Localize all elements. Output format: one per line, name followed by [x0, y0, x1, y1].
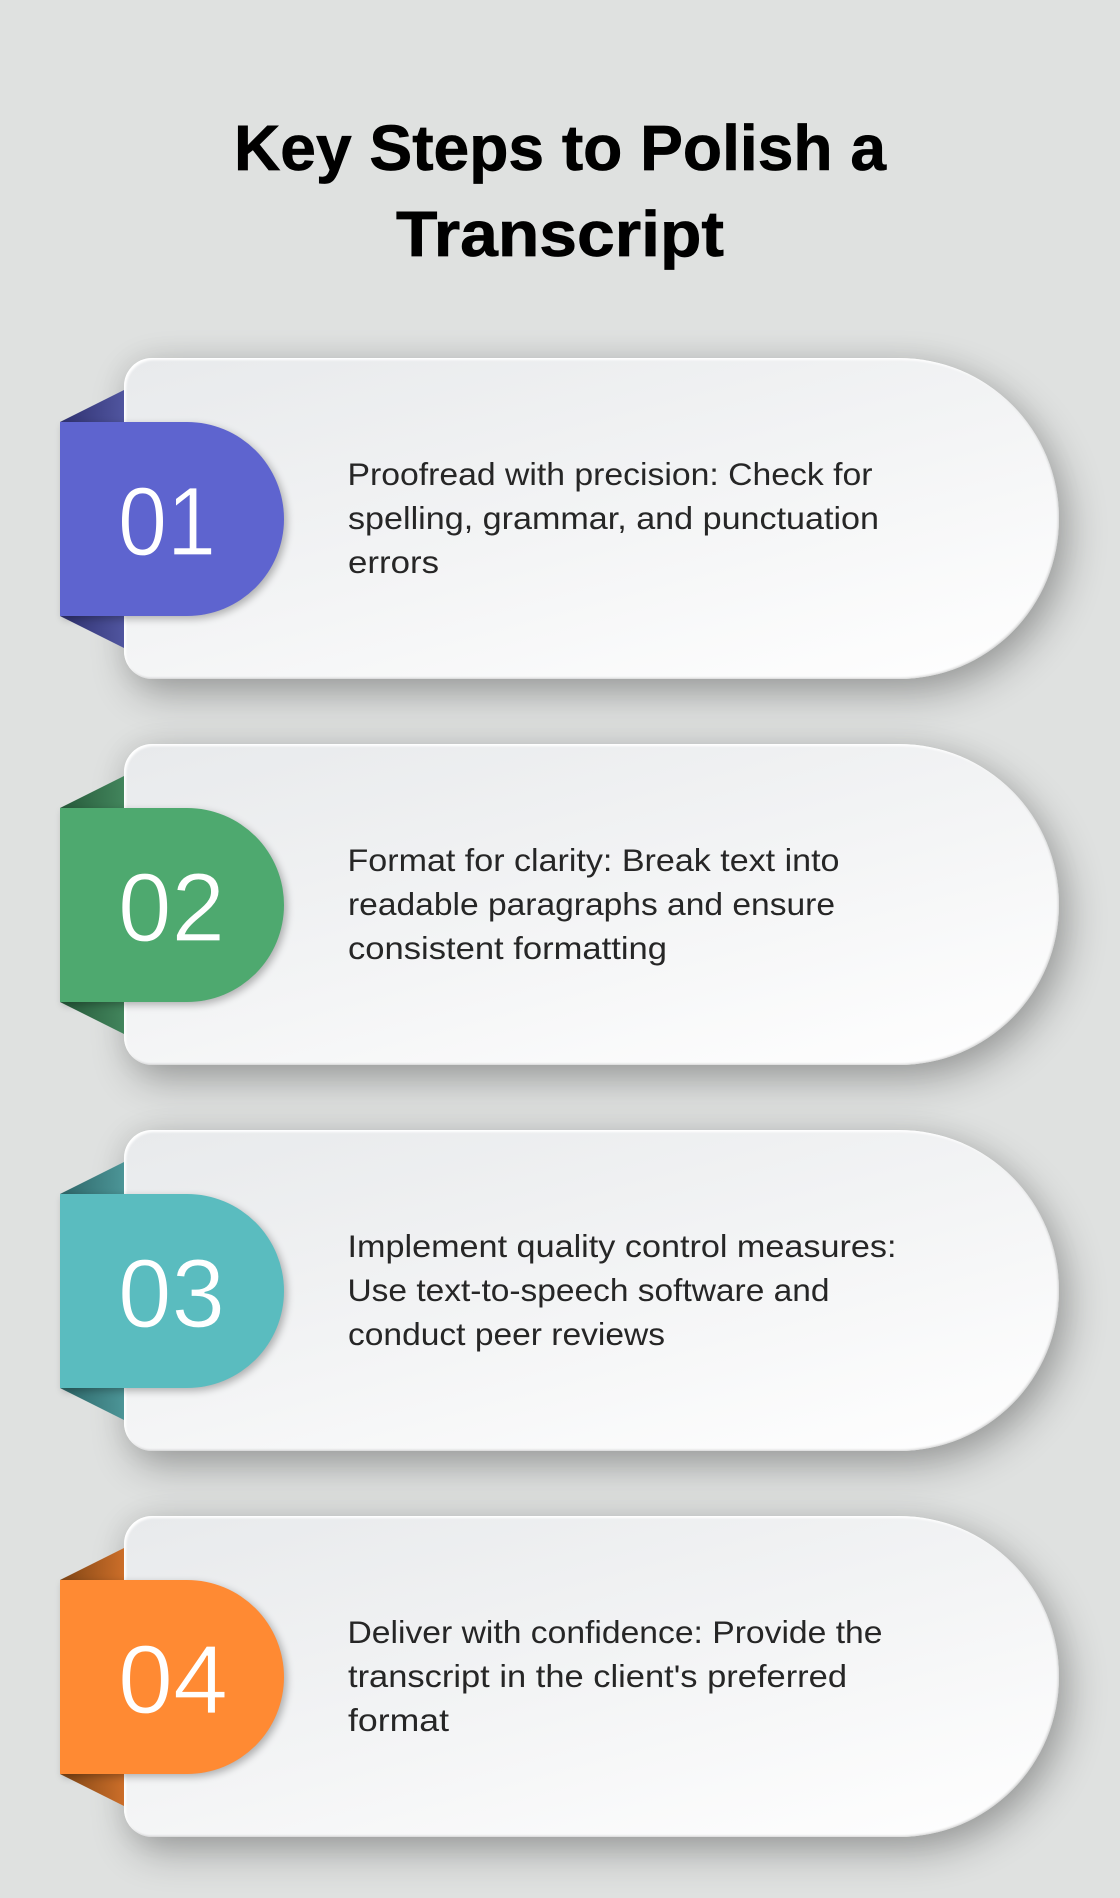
step text: spelling, grammar, and punctuation — [348, 500, 879, 536]
panel: step 3 — [59, 1118, 1088, 1487]
step text: readable paragraphs and ensure — [348, 886, 835, 922]
step text: Proofread with precision: Check for — [348, 456, 872, 492]
ribbon folds — [60, 776, 124, 1034]
card background — [124, 1130, 1059, 1451]
step text: transcript in the client's preferred — [348, 1658, 847, 1694]
number badge — [60, 808, 284, 1002]
card background — [124, 744, 1059, 1065]
title: Transcript — [396, 198, 724, 270]
card background — [124, 1516, 1059, 1837]
step text — [348, 842, 840, 966]
step text: consistent formatting — [348, 930, 667, 966]
step text — [348, 456, 879, 580]
panel: step 2 — [59, 732, 1088, 1101]
card background — [124, 358, 1059, 679]
number badge — [60, 422, 284, 616]
number: 03 — [118, 1239, 225, 1348]
panel: step 4 — [59, 1504, 1088, 1873]
ribbon folds — [60, 1548, 124, 1806]
step text: format — [348, 1702, 449, 1738]
title — [234, 112, 887, 270]
step text: conduct peer reviews — [348, 1316, 665, 1352]
title: Key Steps to Polish a — [234, 112, 886, 184]
number badge — [60, 1194, 284, 1388]
ribbon folds — [60, 1162, 124, 1420]
number: 01 — [118, 467, 216, 576]
ribbon folds — [60, 390, 124, 648]
step text — [348, 1614, 882, 1738]
panel: step 1 — [59, 346, 1088, 715]
step text: errors — [348, 544, 439, 580]
step text — [348, 1228, 896, 1352]
step text: Deliver with confidence: Provide the — [348, 1614, 882, 1650]
step text: Format for clarity: Break text into — [348, 842, 840, 878]
step text: Use text-to-speech software and — [348, 1272, 829, 1308]
number: 02 — [118, 853, 225, 962]
number badge — [60, 1580, 284, 1774]
step text: Implement quality control measures: — [348, 1228, 896, 1264]
number: 04 — [118, 1625, 228, 1734]
